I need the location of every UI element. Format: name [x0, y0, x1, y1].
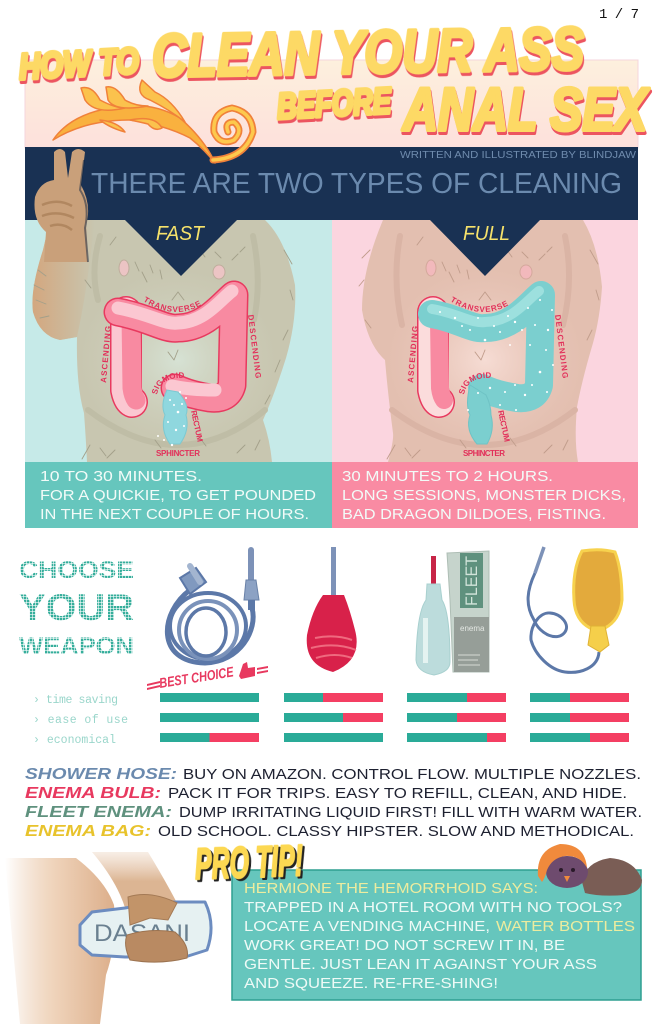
icon: peace sign hand [34, 149, 88, 262]
label: sigmoid: SIGMOID [152, 372, 184, 394]
fast torso [32, 220, 295, 462]
panel: pro tip: WATER BOTTLES [496, 918, 635, 935]
label: sphincter: SPHINCTER [463, 449, 505, 458]
ornament: flourish [53, 80, 253, 163]
stat box: full [332, 462, 638, 528]
illustration: body with water bottle [5, 852, 211, 1024]
colon: ascending, unclean [433, 312, 444, 402]
text block: tool descriptions: PACK IT FOR TRIPS. EASY TO REFILL, CLEAN, AND HIDE. [168, 785, 627, 802]
body hair [359, 237, 599, 459]
panel: pro tip: TRAPPED IN A HOTEL ROOM WITH NO TOOLS? [244, 899, 622, 916]
icon: enema bulb [307, 547, 357, 672]
colon: transverse, descending and sigmoid [118, 291, 234, 398]
water bottle [80, 902, 211, 957]
chart: shower hose ratings [160, 693, 259, 742]
label: ascending: ASCENDING [406, 326, 420, 383]
icon: fleet enema [416, 551, 489, 675]
panel: pro tip: AND SQUEEZE. RE-FRE-SHING! [244, 975, 498, 992]
title: how to: HOW TO [18, 40, 140, 87]
panel: pro tip [232, 870, 641, 1000]
label: sphincter: SPHINCTER [156, 449, 200, 458]
colon labels [99, 296, 263, 458]
stat box: full: BAD DRAGON DILDOES, FISTING. [342, 506, 606, 523]
sparkles [439, 299, 554, 411]
heading: choose your weapon: YOUR [19, 587, 134, 628]
panel: pro tip: LOCATE A VENDING MACHINE, [244, 918, 490, 935]
icon: fleet enema: enema [460, 624, 485, 633]
fast background [25, 220, 332, 462]
chest shading [392, 236, 575, 445]
text block: tool descriptions: OLD SCHOOL. CLASSY HIPSTER. SLOW AND METHODICAL. [158, 823, 634, 840]
panel: pro tip: HERMIONE THE HEMORRHOID SAYS: [244, 880, 538, 897]
label: descending: DESCENDING [246, 314, 263, 379]
text block: tool descriptions: BUY ON AMAZON. CONTROL FLOW. MULTIPLE NOZZLES. [183, 766, 641, 783]
colon labels [406, 296, 570, 458]
heading: choose your weapon: CHOOSE [19, 557, 134, 584]
bottle label: DASANI [94, 920, 190, 947]
text block: tool descriptions [25, 766, 642, 840]
arm [92, 852, 177, 925]
rating labels: › time saving [33, 694, 118, 707]
chart: enema bulb ratings [284, 693, 383, 742]
text block: tool descriptions: ENEMA BAG: [25, 823, 151, 840]
heading: pro tip: PRO TIP! [194, 836, 304, 889]
arm shading [32, 220, 95, 340]
belly glow [78, 268, 278, 452]
heading: two types: THERE ARE TWO TYPES OF CLEANING [91, 168, 622, 200]
panel: pro tip: GENTLE. JUST LEAN IT AGAINST YOUR ASS [244, 956, 597, 973]
nipples [119, 260, 225, 279]
panel: full [332, 220, 638, 462]
full background [332, 220, 638, 462]
label: full: FULL [463, 223, 510, 245]
heading: choose your weapon [19, 557, 134, 660]
badge: best choice: BEST CHOICE [158, 663, 235, 691]
panel: pro tip: WORK GREAT! DO NOT SCREW IT IN, BE [244, 937, 565, 954]
rating labels: › economical [33, 734, 116, 747]
colon: clean transverse, descending, sigmoid [432, 291, 541, 398]
text block: tool descriptions: ENEMA BULB: [25, 785, 161, 802]
belly glow [387, 268, 583, 452]
sparkles [157, 391, 187, 446]
label: fast: FAST [156, 223, 206, 245]
page number: 1 / 7 [599, 7, 639, 23]
clean rectum [468, 385, 492, 444]
chart: enema bag ratings [530, 693, 629, 742]
label: sigmoid: SIGMOID [459, 372, 491, 394]
stat box: fast: FOR A QUICKIE, TO GET POUNDED [40, 487, 316, 504]
byline: WRITTEN AND ILLUSTRATED BY BLINDJAW [400, 150, 637, 161]
nipples [426, 260, 532, 279]
heading: choose your weapon: WEAPON [19, 633, 134, 660]
stat box: fast: IN THE NEXT COUPLE OF HOURS. [40, 506, 309, 523]
colon: ascending [126, 312, 136, 402]
text block: tool descriptions: FLEET ENEMA: [25, 804, 172, 821]
stat box: fast [25, 462, 332, 528]
label: descending: DESCENDING [553, 314, 570, 379]
character: hermione the hemorrhoid [538, 844, 642, 896]
rating labels [33, 694, 128, 747]
icon: thumbs up [239, 662, 255, 679]
navy banner [25, 147, 638, 276]
label: ascending: ASCENDING [99, 326, 113, 383]
rectum, clean [163, 390, 187, 444]
body hair [34, 237, 293, 459]
rating labels: › ease of use [33, 714, 128, 727]
hand [128, 895, 177, 925]
chart: fleet enema ratings [407, 693, 506, 742]
panel: fast [25, 220, 332, 462]
fist [126, 931, 188, 962]
stat box: fast: 10 TO 30 MINUTES. [40, 468, 202, 485]
label: transverse: TRANSVERSE [144, 296, 201, 312]
full torso [362, 220, 602, 462]
text block: tool descriptions: DUMP IRRITATING LIQUID FIRST! FILL WITH WARM WATER. [179, 804, 642, 821]
header panel [25, 60, 638, 148]
title: before: BEFORE [276, 80, 393, 127]
icon: shower hose [167, 550, 259, 663]
chest shading [88, 236, 265, 445]
text block: tool descriptions: SHOWER HOSE: [25, 766, 177, 783]
stat box: full: LONG SESSIONS, MONSTER DICKS, [342, 487, 626, 504]
icon: enema bag [528, 547, 622, 672]
label: rectum: RECTUM [189, 410, 205, 443]
label: rectum: RECTUM [496, 410, 512, 443]
label: transverse: TRANSVERSE [452, 296, 508, 312]
body [5, 858, 115, 1024]
stat box: full: 30 MINUTES TO 2 HOURS. [342, 468, 553, 485]
icon: fleet enema: FLEET [462, 556, 481, 606]
